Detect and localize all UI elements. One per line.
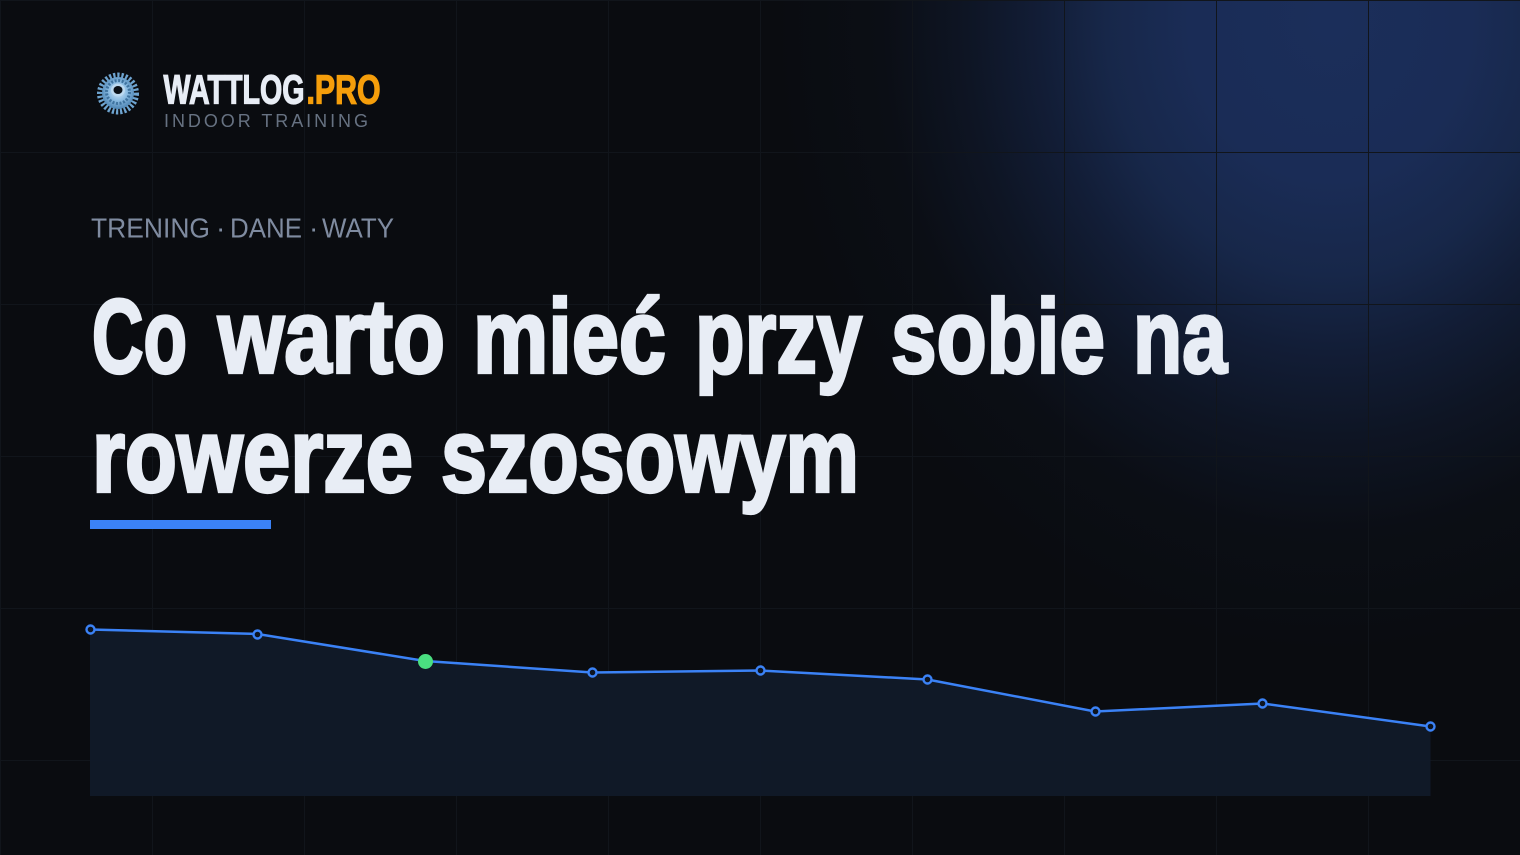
- eyebrow text: ·: [216, 212, 225, 244]
- logo wordmark: WATTLOG: [164, 66, 304, 112]
- icon: cassette sprocket logo: [100, 76, 136, 112]
- title: sobie: [891, 278, 1105, 396]
- highlighted data point: [418, 654, 433, 669]
- logo tagline: INDOOR TRAINING: [164, 111, 368, 131]
- title: [92, 278, 1228, 514]
- chart area fill: [90, 630, 1430, 796]
- title: warto: [217, 278, 445, 396]
- eyebrow text: TRENING: [91, 212, 210, 244]
- logo wordmark: .PRO: [306, 66, 380, 112]
- eyebrow text: [91, 212, 394, 244]
- title: szosowym: [441, 398, 859, 514]
- eyebrow text: ·: [309, 212, 318, 244]
- title: na: [1133, 278, 1228, 396]
- eyebrow text: DANE: [230, 212, 302, 244]
- chart line: [90, 630, 1430, 726]
- title: przy: [695, 278, 862, 396]
- title: mieć: [473, 278, 666, 396]
- title: Co: [92, 278, 187, 396]
- title: rowerze: [92, 398, 413, 514]
- title underline accent: [90, 520, 271, 529]
- line chart: [86, 626, 1434, 796]
- eyebrow text: WATY: [322, 212, 394, 244]
- chart data points: [86, 626, 1434, 730]
